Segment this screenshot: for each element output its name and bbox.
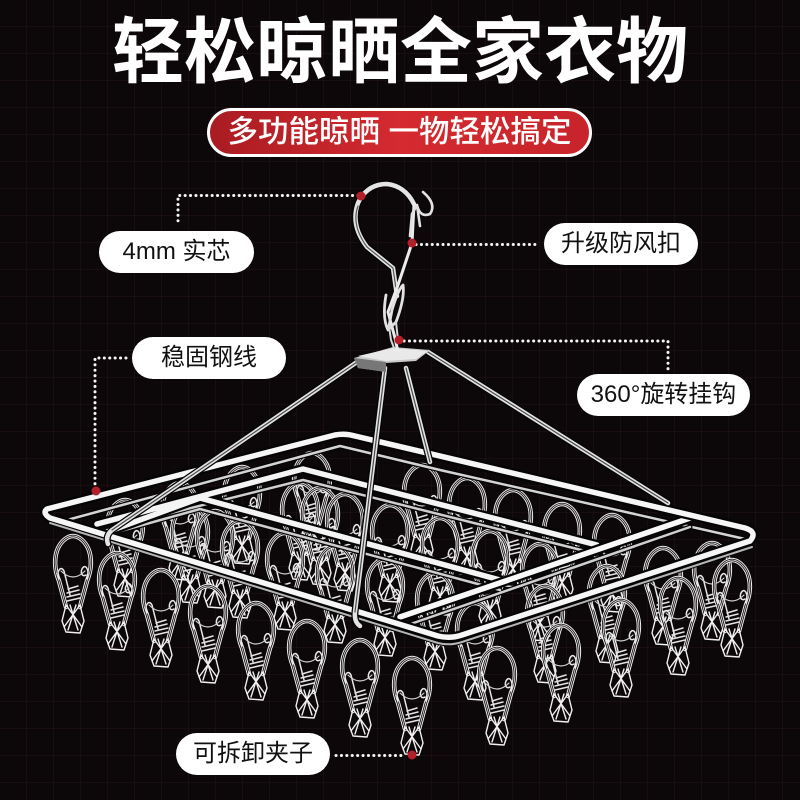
label: 4mm solid core: 4mm 实芯 bbox=[122, 238, 230, 265]
label: 360 swivel hook bbox=[577, 374, 750, 416]
red marker dots bbox=[92, 192, 416, 760]
label: removable clips bbox=[176, 733, 330, 775]
label: windproof latch bbox=[544, 223, 698, 265]
subtitle banner: 多功能晾晒 一物轻松搞定 bbox=[228, 115, 571, 149]
label: 4mm solid core bbox=[99, 231, 254, 273]
label: removable clips: 可拆卸夹子 bbox=[193, 740, 313, 767]
callout leader lines bbox=[95, 196, 668, 756]
label: sturdy steel wire bbox=[132, 337, 286, 379]
label: sturdy steel wire: 稳固钢线 bbox=[161, 344, 257, 371]
front rows of clips bbox=[55, 536, 750, 755]
label: 360 swivel hook: 360°旋转挂钩 bbox=[591, 381, 736, 408]
support wires bbox=[107, 352, 668, 626]
swivel plate bbox=[354, 347, 430, 372]
label: windproof latch: 升级防风扣 bbox=[561, 230, 681, 257]
back rows of clips bbox=[107, 453, 730, 700]
hook with windproof latch bbox=[355, 184, 432, 352]
frame: stainless steel rack bbox=[45, 434, 753, 644]
title: 轻松晾晒全家衣物 bbox=[112, 13, 688, 93]
subtitle banner bbox=[207, 108, 592, 157]
